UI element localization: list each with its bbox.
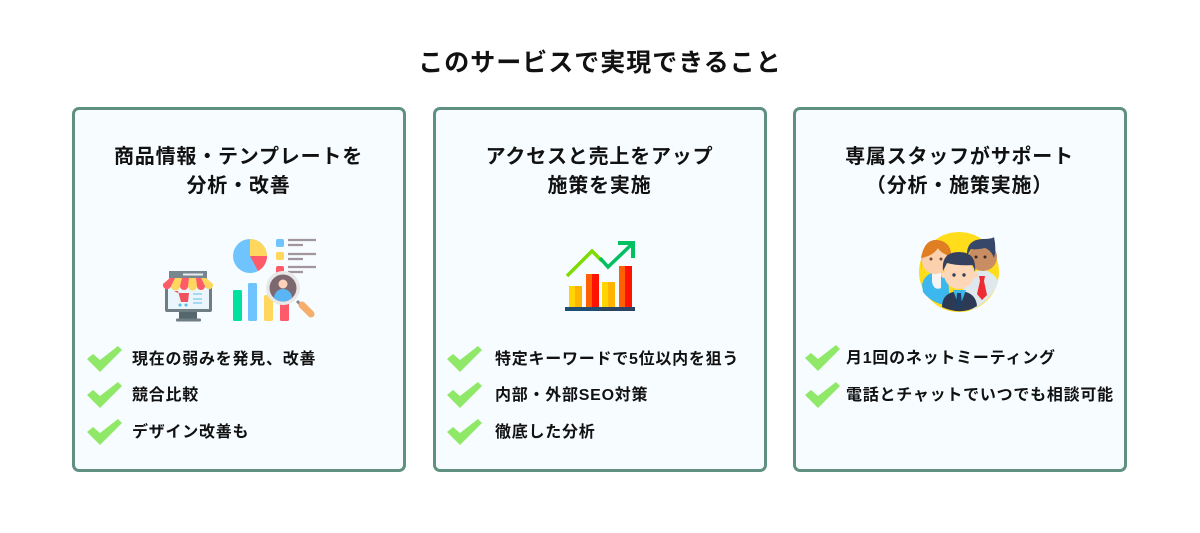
- item 3: 徹底した分析: [495, 424, 596, 441]
- heading: product analysis: 商品情報・テンプレートを: [114, 146, 363, 168]
- panel: access and sales: [433, 107, 767, 472]
- woman: [922, 272, 950, 306]
- check 3: [87, 419, 122, 445]
- item 2: 内部・外部SEO対策: [495, 387, 648, 404]
- item 1: 月1回のネットミーティング: [846, 350, 1056, 367]
- title: このサービスで実現できること: [418, 49, 782, 77]
- check 2: [87, 382, 122, 408]
- check 3: [447, 419, 482, 445]
- icon: shop monitor and charts: [162, 238, 316, 322]
- man center: [942, 292, 977, 311]
- item 3: デザイン改善も: [132, 424, 249, 441]
- item 2: 電話とチャットでいつでも相談可能: [846, 387, 1114, 404]
- heading: access and sales: アクセスと売上をアップ: [486, 146, 713, 168]
- panel: dedicated staff: [793, 107, 1127, 472]
- heading: dedicated staff: 専属スタッフがサポート: [845, 146, 1074, 168]
- man right: [962, 270, 998, 310]
- check 1: [447, 346, 482, 372]
- check 1: [87, 346, 122, 372]
- icon: growth chart: [565, 241, 635, 311]
- check 2: [805, 382, 840, 408]
- check 1: [805, 345, 840, 371]
- heading: dedicated staff: （分析・施策実施）: [866, 175, 1053, 197]
- item 2: 競合比較: [132, 387, 199, 404]
- heading: product analysis: 分析・改善: [186, 175, 290, 197]
- heading: access and sales: 施策を実施: [548, 175, 652, 197]
- item 1: 特定キーワードで5位以内を狙う: [495, 351, 739, 368]
- heading: product analysis: [114, 146, 363, 197]
- heading: access and sales: [486, 146, 713, 197]
- item 1: 現在の弱みを発見、改善: [132, 351, 316, 368]
- icon: three staff members: [919, 232, 999, 312]
- heading: dedicated staff: [845, 146, 1074, 197]
- panel: product analysis: [72, 107, 406, 472]
- check 2: [447, 382, 482, 408]
